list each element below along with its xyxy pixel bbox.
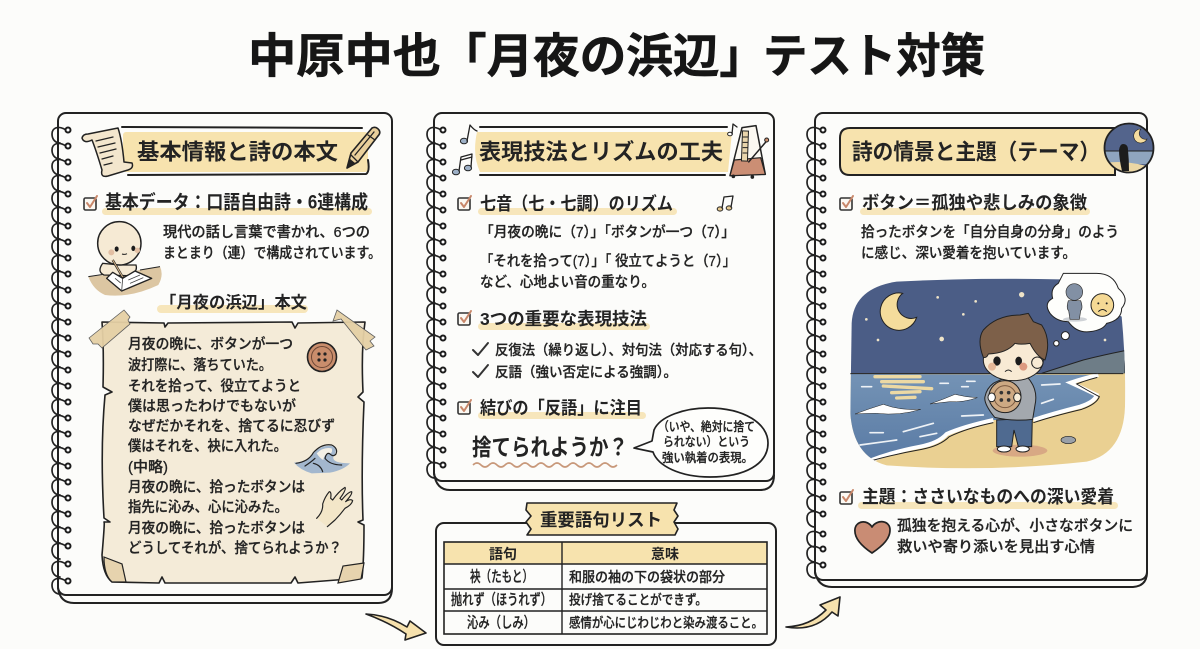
title: 「月夜の浜辺」 — [440, 30, 766, 82]
icon: pencil — [347, 127, 380, 168]
poem text: なぜだかそれを、捨てるに忍びず — [128, 418, 335, 435]
heading: expression techniques: 表現技法とリズムの工夫 — [479, 138, 723, 164]
body text: rhythm examples: 「月夜の晩に（7）」「ボタンが一つ（7）」 — [480, 223, 735, 241]
poem text: 月夜の晩に、拾ったボタンは — [128, 479, 305, 496]
poem text — [128, 335, 342, 557]
sea — [847, 374, 1098, 460]
subheading: button as symbol: ボタン＝孤独や悲しみの象徴 — [862, 193, 1087, 213]
heading: scene and theme — [840, 128, 1115, 175]
vocabulary table: 沁み（しみ） — [467, 614, 535, 632]
icon: metronome — [730, 126, 769, 179]
tape: right — [333, 310, 375, 350]
arrow: vocabulary to right panel — [786, 597, 840, 628]
vocabulary table: 和服の袖の下の袋状の部分 — [569, 569, 725, 585]
illustration: boy on the moonlit beach — [847, 273, 1130, 473]
panel: expression techniques — [427, 113, 774, 490]
heading: basic information: 基本情報と詩の本文 — [137, 140, 338, 164]
subheading: basic data: 基本データ：口語自由詩・6連構成 — [105, 190, 368, 214]
night sky — [847, 277, 1130, 375]
heading: scene and theme: 詩の情景と主題（テーマ） — [852, 140, 1100, 164]
body text: button meaning: に感じ、深い愛着を抱いています。 — [861, 244, 1076, 262]
vocabulary table: 語句 — [489, 546, 517, 562]
ribbon heading: 重要語句リスト — [540, 510, 662, 530]
poem text: (中略) — [128, 459, 168, 476]
shadow — [993, 445, 1047, 457]
heading: basic information — [122, 127, 369, 175]
boy — [997, 418, 1032, 447]
list: techniques: 反復法（繰り返し）、対句法（対応する句）、 — [495, 342, 762, 358]
waves — [855, 394, 977, 414]
panel: basic information and poem — [52, 113, 392, 603]
icon: writing child — [88, 222, 162, 296]
emphasized phrase — [472, 434, 628, 467]
hill — [1042, 351, 1125, 374]
subheading: theme: 主題：ささいなものへの深い愛着 — [862, 487, 1114, 507]
title: 中原中也 — [248, 30, 441, 82]
icon: button — [308, 342, 336, 372]
speech bubble: （いや、絶対に捨て — [658, 419, 755, 434]
moon — [880, 293, 917, 330]
body text: basic data — [163, 224, 381, 262]
subheading: closing rhetorical question: 結びの「反語」に注目 — [480, 398, 642, 418]
shoreline foam — [872, 375, 1098, 460]
thought bubble — [1047, 273, 1125, 332]
horizon — [850, 372, 1123, 375]
body text: button meaning — [861, 224, 1119, 262]
poem paper — [89, 310, 375, 583]
poem text: 月夜の晩に、ボタンが一つ — [128, 335, 293, 353]
subheading: seven-syllable rhythm: 七音（七・七調）のリズム — [480, 193, 673, 214]
vocabulary table: 感情が心にじわじわと染み渡ること。 — [569, 614, 763, 630]
body text: rhythm examples: など、心地よい音の重なり。 — [480, 274, 655, 291]
poem text: どうしてそれが、捨てられようか？ — [128, 539, 342, 557]
sand — [847, 373, 1130, 473]
list: techniques: 反語（強い否定による強調）。 — [495, 364, 677, 380]
body text: basic data: まとまり（連）で構成されています。 — [163, 244, 381, 262]
icon: moonlit silhouette — [1104, 122, 1154, 174]
panel: key vocabulary — [436, 503, 776, 645]
poem text: 僕はそれを、袂に入れた。 — [128, 438, 287, 455]
icon: wave — [294, 445, 350, 473]
vocabulary table — [444, 542, 767, 634]
poem text: それを拾って、役立てようと — [128, 378, 301, 395]
poem text: 僕は思ったわけでもないが — [128, 397, 296, 415]
tape: left — [89, 310, 130, 348]
vocabulary table: 袂（たもと） — [470, 568, 533, 586]
pebble — [1061, 436, 1076, 444]
poem text: 波打際に、落ちていた。 — [128, 357, 272, 374]
moon reflection — [875, 377, 932, 398]
poem text: 月夜の晩に、拾ったボタンは — [128, 520, 305, 537]
title: テスト対策 — [763, 30, 985, 82]
stars — [865, 292, 1106, 341]
icon: scroll — [82, 128, 132, 176]
body text: rhythm examples — [480, 223, 736, 291]
arrow: left panel to vocabulary — [366, 614, 426, 640]
subheading: three techniques: 3つの重要な表現技法 — [480, 309, 647, 329]
icon: heart — [855, 522, 890, 553]
ribbon heading — [526, 503, 678, 535]
icon: small music note — [717, 196, 733, 211]
panel: scene and theme — [807, 113, 1160, 587]
speech bubble — [634, 408, 768, 477]
vocabulary table: 投げ捨てることができず。 — [569, 592, 707, 608]
poem text: 指先に沁み、心に沁みた。 — [128, 499, 288, 516]
vocabulary table: 意味 — [651, 546, 679, 562]
icon: music notes — [452, 124, 737, 175]
emphasized phrase: 捨てられようか？ — [472, 434, 628, 460]
speech bubble: 強い執着の表現。 — [662, 450, 753, 465]
speech bubble: られない）という — [663, 435, 750, 449]
body text: rhythm examples: 「それを拾って(7）」「 役立てようと（7）」 — [480, 253, 736, 270]
list: techniques — [473, 342, 762, 380]
body text: basic data: 現代の話し言葉で書かれ、6つの — [163, 224, 370, 241]
subheading: poem: 「月夜の浜辺」本文 — [160, 293, 307, 312]
body text: theme — [897, 516, 1133, 556]
title — [248, 30, 985, 82]
body text: button meaning: 拾ったボタンを「自分自身の分身」のよう — [861, 224, 1119, 241]
heading: expression techniques — [475, 127, 732, 175]
icon: hand — [317, 487, 353, 527]
body text: theme: 孤独を抱える心が、小さなボタンに — [897, 516, 1133, 534]
vocabulary table: 抛れず（ほうれず） — [451, 592, 552, 608]
body text: theme: 救いや寄り添いを見出す心情 — [897, 538, 1095, 556]
